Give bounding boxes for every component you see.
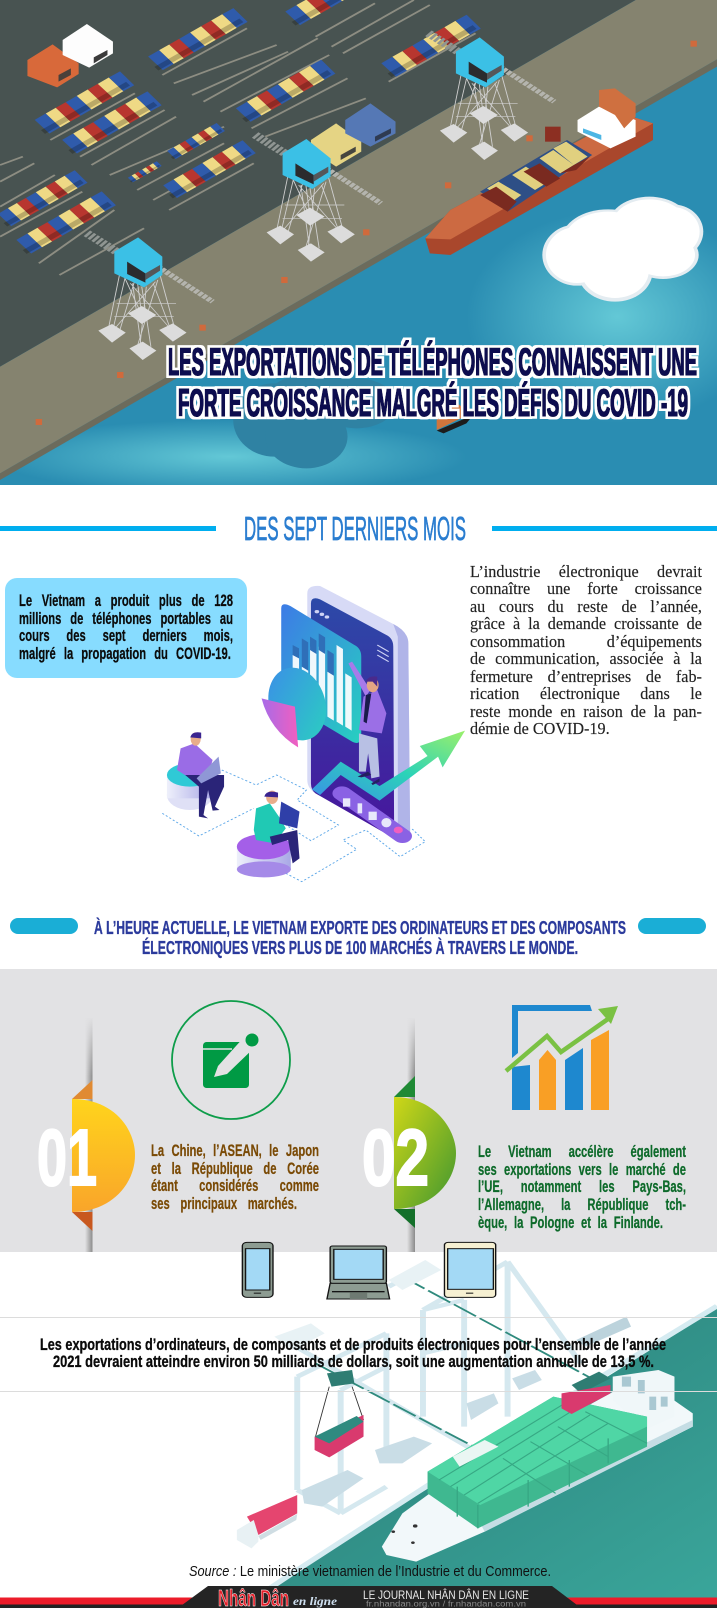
section heading: DES SEPT DERNIERS MOIS — [244, 510, 466, 547]
red truck — [247, 1495, 297, 1535]
footer — [0, 1585, 717, 1608]
pie chart — [262, 665, 332, 743]
ship superstructure — [613, 1370, 674, 1430]
person on laptop right — [237, 791, 300, 877]
phone — [307, 586, 410, 843]
callout: phones produced: cours des sept derniers mois, — [19, 626, 233, 645]
footer: en ligne — [293, 1594, 338, 1608]
icon: growth bar chart — [506, 1005, 618, 1110]
text block: electronics industry: de communication, associée à la — [470, 649, 702, 668]
sea — [247, 1308, 717, 1608]
text: EU exports: l’Allemagne, la République tch- — [478, 1195, 686, 1214]
cargo ship — [425, 115, 653, 255]
text block: electronics industry: grâce à la demande croissante de — [470, 614, 702, 633]
text: main markets: La Chine, l’ASEAN, le Japon — [151, 1141, 319, 1160]
panel 01 badge: 01 — [37, 1113, 97, 1202]
text block: electronics industry: rication électronique dans le — [470, 684, 702, 703]
pink container on deck — [562, 1385, 610, 1414]
text: export forecast — [40, 1336, 666, 1371]
man standing — [348, 662, 386, 785]
cloud — [542, 197, 703, 302]
ship hull — [382, 1377, 693, 1562]
cranes — [87, 233, 213, 360]
panel 02 badge: 02 — [362, 1113, 429, 1202]
callout: phones produced: malgré la propagation du COVID-19. — [19, 644, 231, 663]
section heading — [0, 510, 717, 547]
panel 01 badge — [37, 1017, 135, 1252]
source: Source : Le ministère vietnamien de l’Industrie et du Commerce. — [189, 1563, 551, 1580]
hero illustration: port scene — [0, 0, 717, 493]
text: EU exports: èque, la Pologne et la Finlande. — [478, 1213, 663, 1232]
crane load — [545, 127, 561, 142]
banner heading — [10, 917, 706, 958]
text block: electronics industry: reste monde en raison de la pan- — [470, 702, 702, 721]
chart panel — [281, 604, 361, 743]
person on laptop left — [167, 732, 224, 818]
small boat — [436, 404, 461, 430]
text: main markets: ses principaux marchés. — [151, 1194, 297, 1213]
text block: electronics industry: connaître une forte croissance — [470, 579, 702, 598]
container yard ground — [0, 0, 636, 367]
illustration: cargo ship port — [237, 1260, 717, 1608]
container rows — [155, 15, 241, 69]
text: EU exports: Le Vietnam accélère également — [478, 1142, 686, 1161]
text block: electronics industry: démie de COVID-19. — [470, 719, 610, 738]
text: main markets: et la République de Corée — [151, 1159, 319, 1178]
text block: electronics industry: L’industrie électronique devrait — [470, 562, 702, 580]
panel 02 badge — [362, 1017, 456, 1252]
callout: phones produced: Le Vietnam a produit plus de 128 — [19, 591, 233, 610]
callout: phones produced: millions de téléphones portables au — [19, 609, 233, 628]
yard rails — [0, 0, 476, 275]
icon: note and pencil — [172, 1001, 290, 1119]
water — [0, 0, 717, 485]
panel: grey background — [0, 969, 717, 1252]
growth arrow — [312, 731, 465, 801]
trolley — [572, 1372, 610, 1393]
icon: laptop — [327, 1246, 390, 1299]
illustration: phone with charts and people — [162, 586, 465, 882]
deck containers — [428, 1397, 647, 1528]
text block: electronics industry: fermeture d’entreprises de fab- — [470, 667, 702, 686]
trucks — [375, 1437, 432, 1463]
text: main markets — [151, 1141, 319, 1213]
network dotted lines — [162, 770, 425, 882]
icon: smartphone — [242, 1242, 273, 1297]
bollards — [36, 41, 697, 425]
text: EU exports — [478, 1142, 686, 1232]
text: EU exports: ses exportations vers le marché de — [478, 1160, 686, 1179]
text: main markets: étant considérés comme — [151, 1176, 319, 1195]
callout: phones produced — [4, 578, 247, 678]
text block: electronics industry: consommation d’équipements — [470, 632, 702, 651]
hanging container — [315, 1415, 364, 1457]
cloud shadow — [233, 373, 396, 468]
control bar — [342, 793, 402, 836]
text: EU exports: l’UE, notamment les Pays-Bas, — [478, 1177, 686, 1196]
title — [168, 340, 697, 425]
text block: electronics industry — [470, 562, 702, 738]
icon: tablet — [444, 1242, 496, 1297]
quay — [0, 0, 717, 473]
text block: electronics industry: au cours du reste de l’année, — [470, 597, 702, 616]
footer: LE JOURNAL NHÂN DÂN EN LIGNE — [363, 1589, 529, 1602]
port cranes — [279, 1262, 581, 1513]
warehouses — [27, 44, 79, 87]
